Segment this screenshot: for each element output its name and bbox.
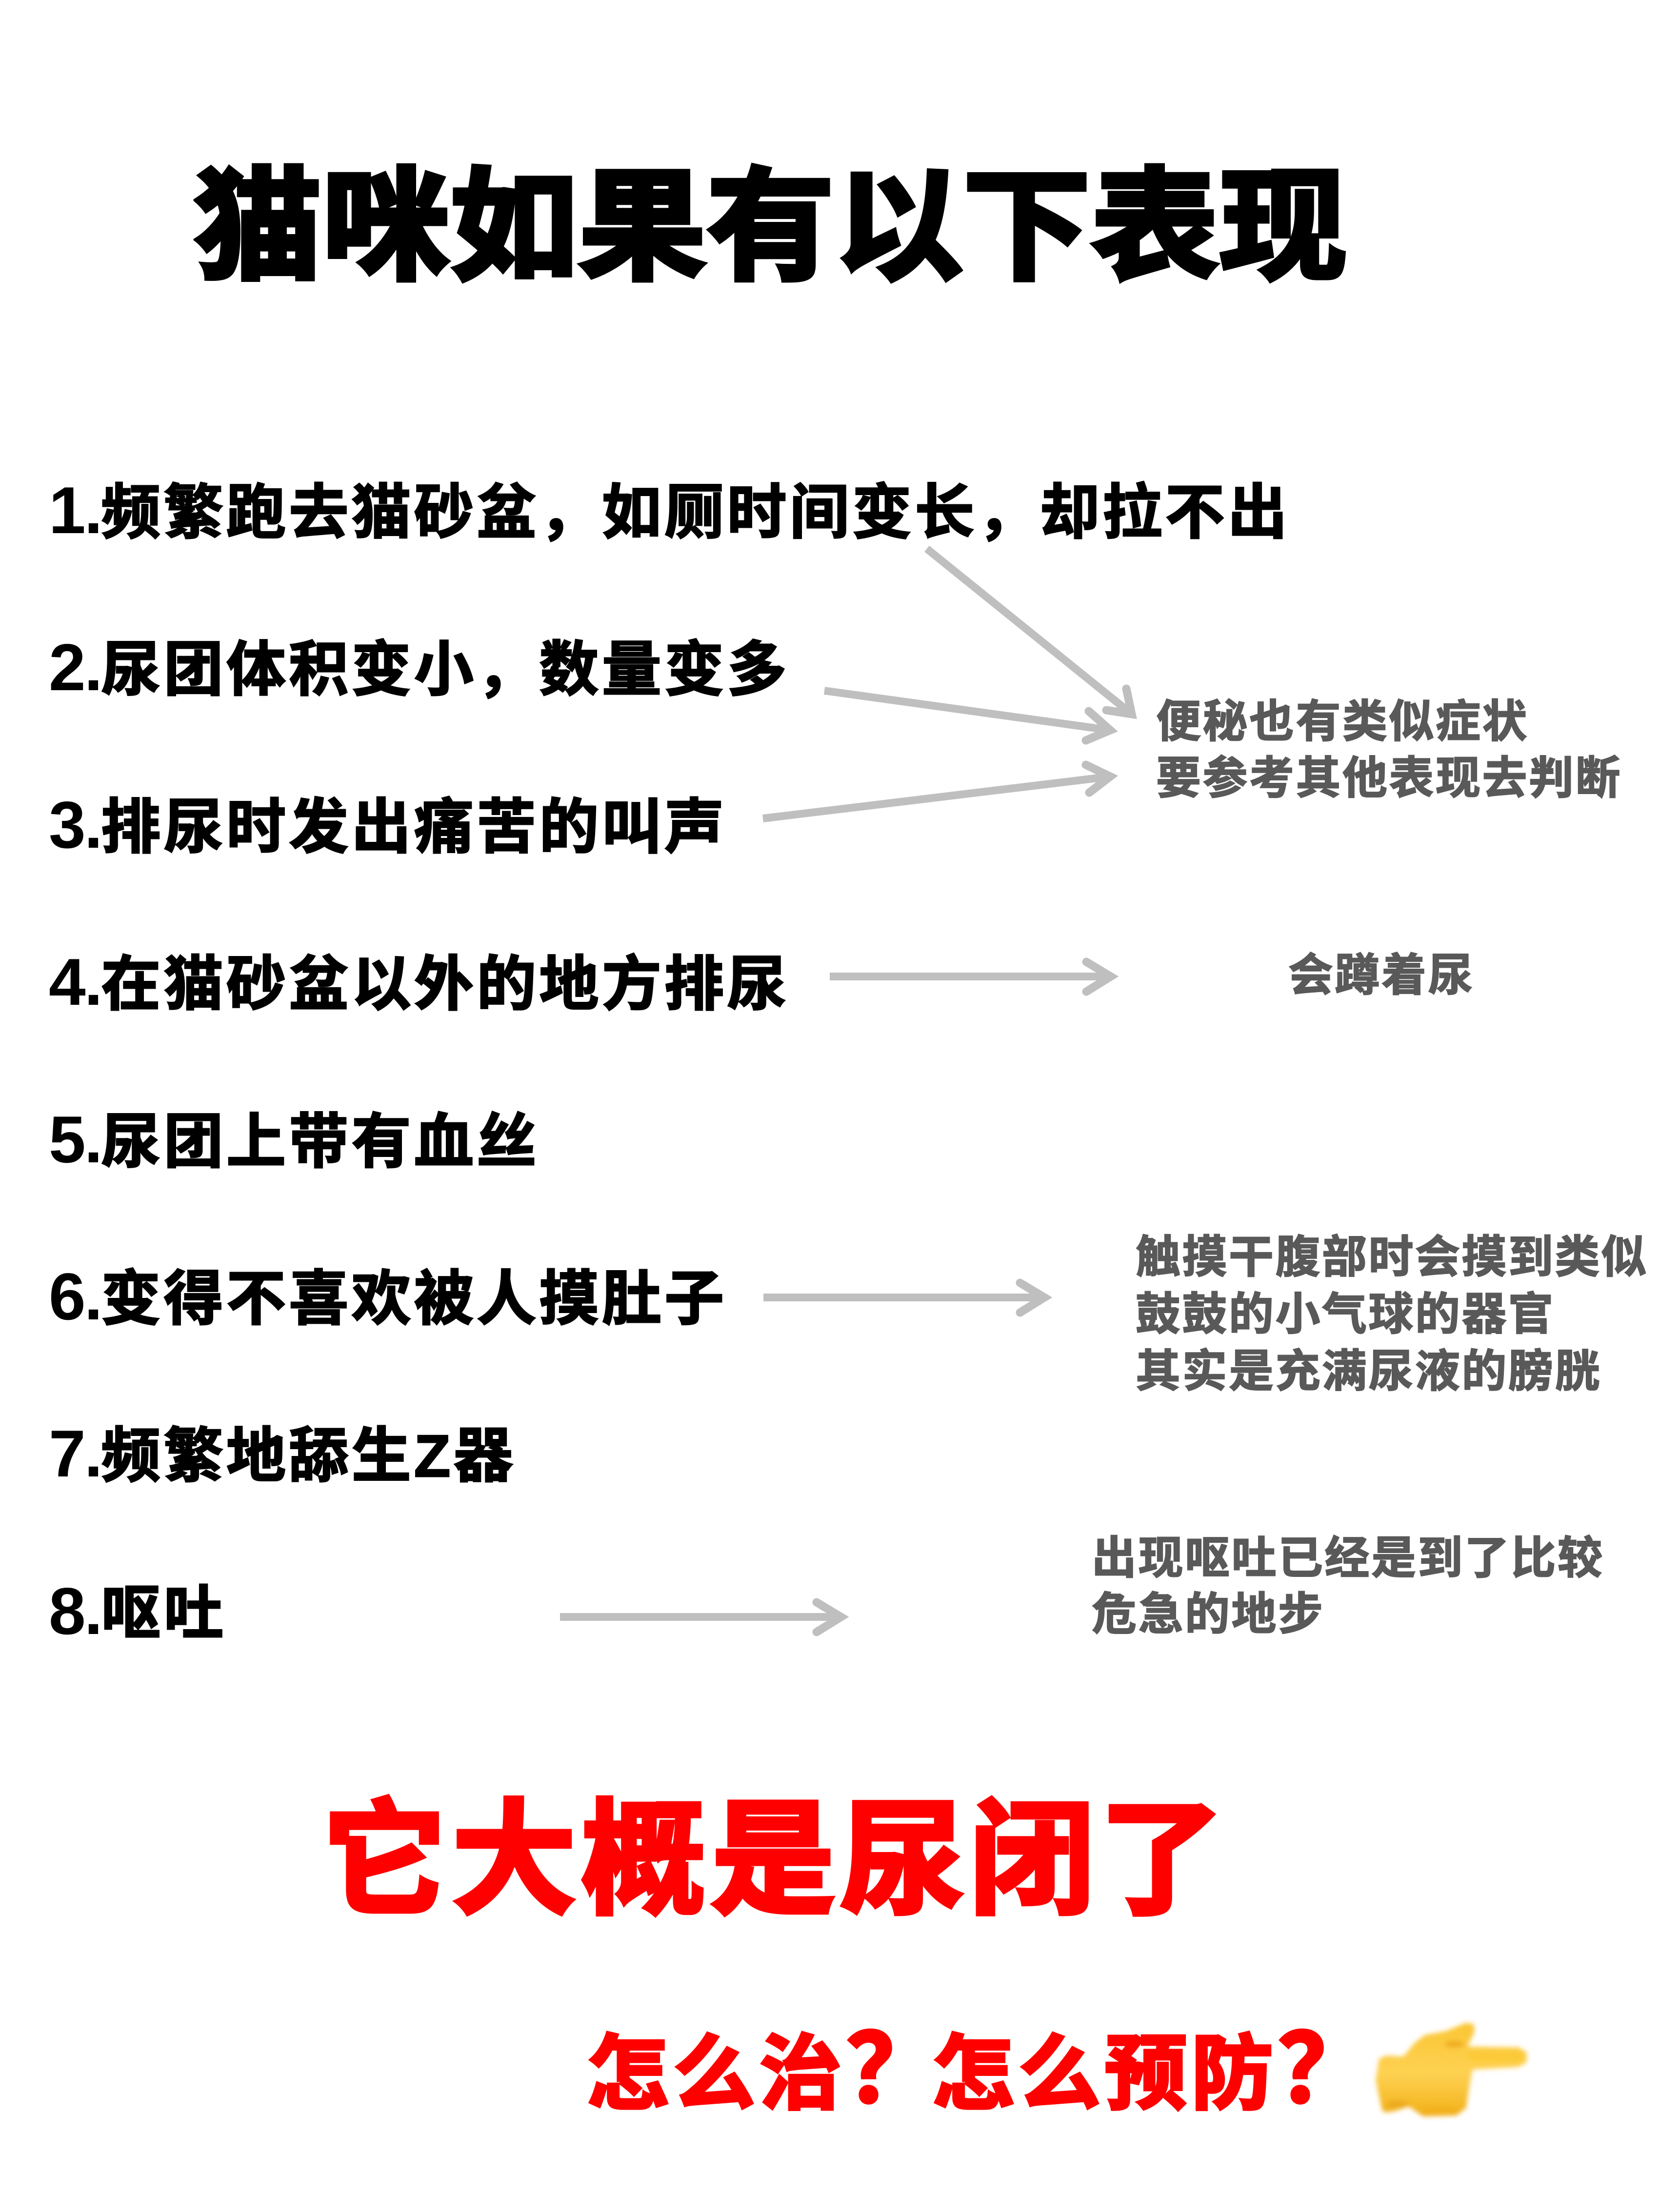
note: vomiting: 危急的地步 [1092,1590,1325,1639]
note: bladder [1136,1233,1648,1396]
arrow: item 2 to constipation note [824,687,1118,744]
item 5: 5.尿团上带有血丝 [49,1102,540,1176]
item 3: 3.排尿时发出痛苦的叫声 [49,788,727,862]
title: 猫咪如果有以下表现 [194,159,1347,295]
note: bladder: 触摸干腹部时会摸到类似 [1136,1233,1648,1282]
item 8: 8.呕吐 [49,1574,226,1648]
note: vomiting [1092,1534,1604,1639]
item 1: 1.频繁跑去猫砂盆，如厕时间变长，却拉不出 [49,473,1290,547]
note: bladder: 其实是充满尿液的膀胱 [1136,1347,1601,1396]
note: vomiting: 出现呕吐已经是到了比较 [1092,1534,1604,1583]
note: bladder: 鼓鼓的小气球的器官 [1136,1290,1555,1339]
arrow: item 6 to bladder note [763,1279,1053,1317]
item 6: 6.变得不喜欢被人摸肚子 [49,1259,727,1334]
item 4: 4.在猫砂盆以外的地方排尿 [49,945,790,1019]
note: squatting: 会蹲着尿 [1288,951,1475,1000]
panel: symptom list [49,473,1290,1648]
note: constipation: 便秘也有类似症状 [1156,697,1529,747]
question callout: 怎么治？怎么预防？ [587,2016,1364,2123]
note: constipation [1156,697,1622,803]
icon: pointing hand [1372,2019,1531,2120]
item 2: 2.尿团体积变小，数量变多 [49,630,790,704]
note: constipation: 要参考其他表现去判断 [1156,754,1622,803]
arrow: item 3 to constipation note [762,761,1118,822]
arrow: item 4 to squatting note [830,958,1119,996]
arrow: item 8 to vomiting note [560,1598,849,1636]
arrow: item 1 to constipation note [924,545,1137,719]
conclusion heading: 它大概是尿闭了 [322,1791,1229,1930]
item 7: 7.频繁地舔生Z器 [49,1416,516,1491]
